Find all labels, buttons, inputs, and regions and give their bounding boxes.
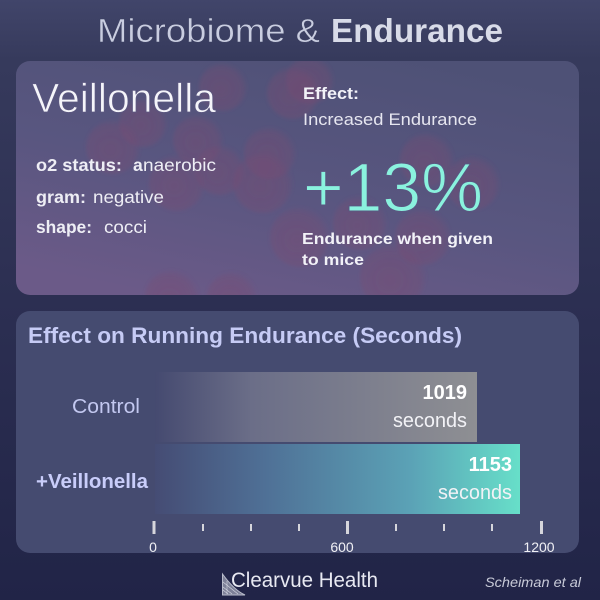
stat caption: Endurance when given [302, 231, 493, 248]
x axis [149, 521, 555, 555]
x axis: 600 [330, 539, 354, 555]
bacteria background image [88, 61, 496, 295]
title: Microbiome & [97, 12, 320, 49]
bar: control: 1019 [422, 382, 467, 404]
shape: shape: [36, 217, 92, 237]
gram: negative [93, 187, 164, 207]
x axis: 0 [149, 539, 157, 555]
bar: control: seconds [393, 410, 467, 432]
o2 status: o2 status: [36, 155, 122, 175]
x axis: 1200 [523, 539, 555, 555]
source citation: Scheiman et al [485, 574, 582, 590]
chart heading: Effect on Running Endurance (Seconds) [28, 323, 462, 348]
bar: +Veillonella [36, 444, 520, 514]
bar: +Veillonella: +Veillonella [36, 471, 149, 493]
shape: cocci [104, 217, 147, 237]
icon: Clearvue logo triangle [222, 574, 245, 595]
stat caption: to mice [302, 252, 364, 269]
effect label: Effect: [303, 85, 359, 103]
effect value: Increased Endurance [303, 110, 477, 129]
bar: +Veillonella: seconds [438, 482, 512, 504]
panel: running endurance chart [16, 311, 579, 555]
brand name: Clearvue Health [231, 569, 378, 592]
stat: +13%: +13% [303, 149, 483, 226]
bar: control: Control [72, 396, 140, 418]
panel: Veillonella profile [16, 61, 579, 295]
bar: control [72, 372, 477, 442]
gram: gram: [36, 187, 86, 207]
o2 status: a [133, 155, 143, 175]
bar: +Veillonella: 1153 [469, 454, 512, 476]
o2 status: naerobic [143, 155, 216, 175]
bacterium name: Veillonella [32, 75, 216, 121]
title: Endurance [331, 12, 503, 49]
